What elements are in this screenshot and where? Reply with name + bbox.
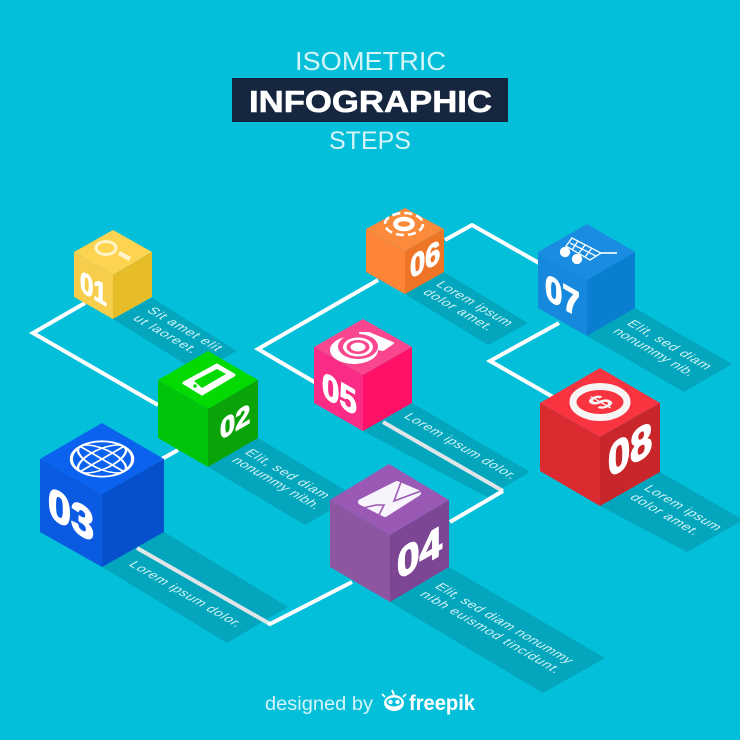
panel: step 6 caption: Lorem ipsum xyxy=(432,279,517,328)
connector: steps 4 to 5 xyxy=(383,422,503,522)
number 05: 05 xyxy=(322,363,357,424)
panel: step 3 caption: Lorem ipsum dolor. xyxy=(125,559,247,629)
icon: freepik mascot xyxy=(382,690,406,711)
footer credit xyxy=(265,690,475,715)
panel: step 8 caption xyxy=(600,472,740,552)
cube 05 xyxy=(314,319,412,431)
number 07: 07 xyxy=(545,265,580,326)
cube 01 xyxy=(74,230,152,319)
title xyxy=(232,46,508,155)
connector: steps 5 to 6 xyxy=(258,280,378,383)
icon: camera xyxy=(330,333,393,364)
panel: step 5 caption: Lorem ipsum dolor. xyxy=(400,411,522,481)
panel: step 1 caption xyxy=(113,298,237,372)
panel: step 3 caption xyxy=(102,532,288,643)
number 04: 04 xyxy=(397,516,443,589)
panel: step 6 caption xyxy=(405,272,528,345)
icon: dollar coin: $ xyxy=(580,390,621,414)
connector: steps 7 to 8 xyxy=(490,323,559,397)
number 08: 08 xyxy=(608,410,652,488)
connector: steps 1 to 2 xyxy=(33,303,158,405)
icon: aperture xyxy=(385,213,423,235)
cube 04 xyxy=(330,464,449,602)
title banner: INFOGRAPHIC xyxy=(249,84,492,119)
icon: globe xyxy=(59,434,145,484)
panel: step 2 caption xyxy=(208,438,355,525)
title banner xyxy=(232,78,508,122)
title line: steps: STEPS xyxy=(329,127,411,155)
connector: steps 6 to 7 xyxy=(445,225,539,263)
panel: step 7 caption: Elit, sed diam xyxy=(623,318,716,372)
cube 06 xyxy=(366,208,444,294)
panel: step 4 caption: nibh euismod tincidunt. xyxy=(416,589,565,675)
number 03: 03 xyxy=(48,477,94,553)
panel: step 5 caption xyxy=(363,403,530,497)
footer credit: designed by xyxy=(265,694,374,715)
panel: step 7 caption xyxy=(587,308,732,392)
cube 02 xyxy=(158,351,258,467)
panel: step 6 caption: dolor amet. xyxy=(419,287,498,333)
panel: step 8 caption: Lorem ipsum xyxy=(640,483,726,533)
connector: steps 2 to 3 xyxy=(160,450,178,460)
connector: steps 3 to 4 xyxy=(137,548,352,624)
number 02: 02 xyxy=(220,397,250,446)
icon: envelope xyxy=(361,482,421,517)
panel: step 2 caption: Elit, sed diam xyxy=(241,447,334,501)
footer credit: freepik xyxy=(409,692,475,715)
panel: step 7 caption: nonummy nib. xyxy=(609,326,699,378)
number 01: 01 xyxy=(80,265,107,314)
title line: isometric: ISOMETRIC xyxy=(295,46,446,76)
icon: smartphone xyxy=(184,365,234,394)
panel: step 4 caption: Elit, sed diam nonummy xyxy=(431,581,578,666)
cube 03 xyxy=(40,423,164,567)
panel: step 2 caption: nonummy nibh. xyxy=(228,455,325,511)
cube 08 xyxy=(540,368,660,506)
icon: magnifier xyxy=(96,242,130,259)
panel: step 1 caption: ut laoreet. xyxy=(129,313,202,355)
icon: shopping cart xyxy=(560,238,617,264)
cube 07 xyxy=(538,224,635,336)
number 06: 06 xyxy=(410,232,440,286)
panel: step 8 caption: dolor amet. xyxy=(626,492,704,537)
panel: step 4 caption xyxy=(390,567,605,693)
panel: step 1 caption: Sit amet elit xyxy=(143,305,227,353)
